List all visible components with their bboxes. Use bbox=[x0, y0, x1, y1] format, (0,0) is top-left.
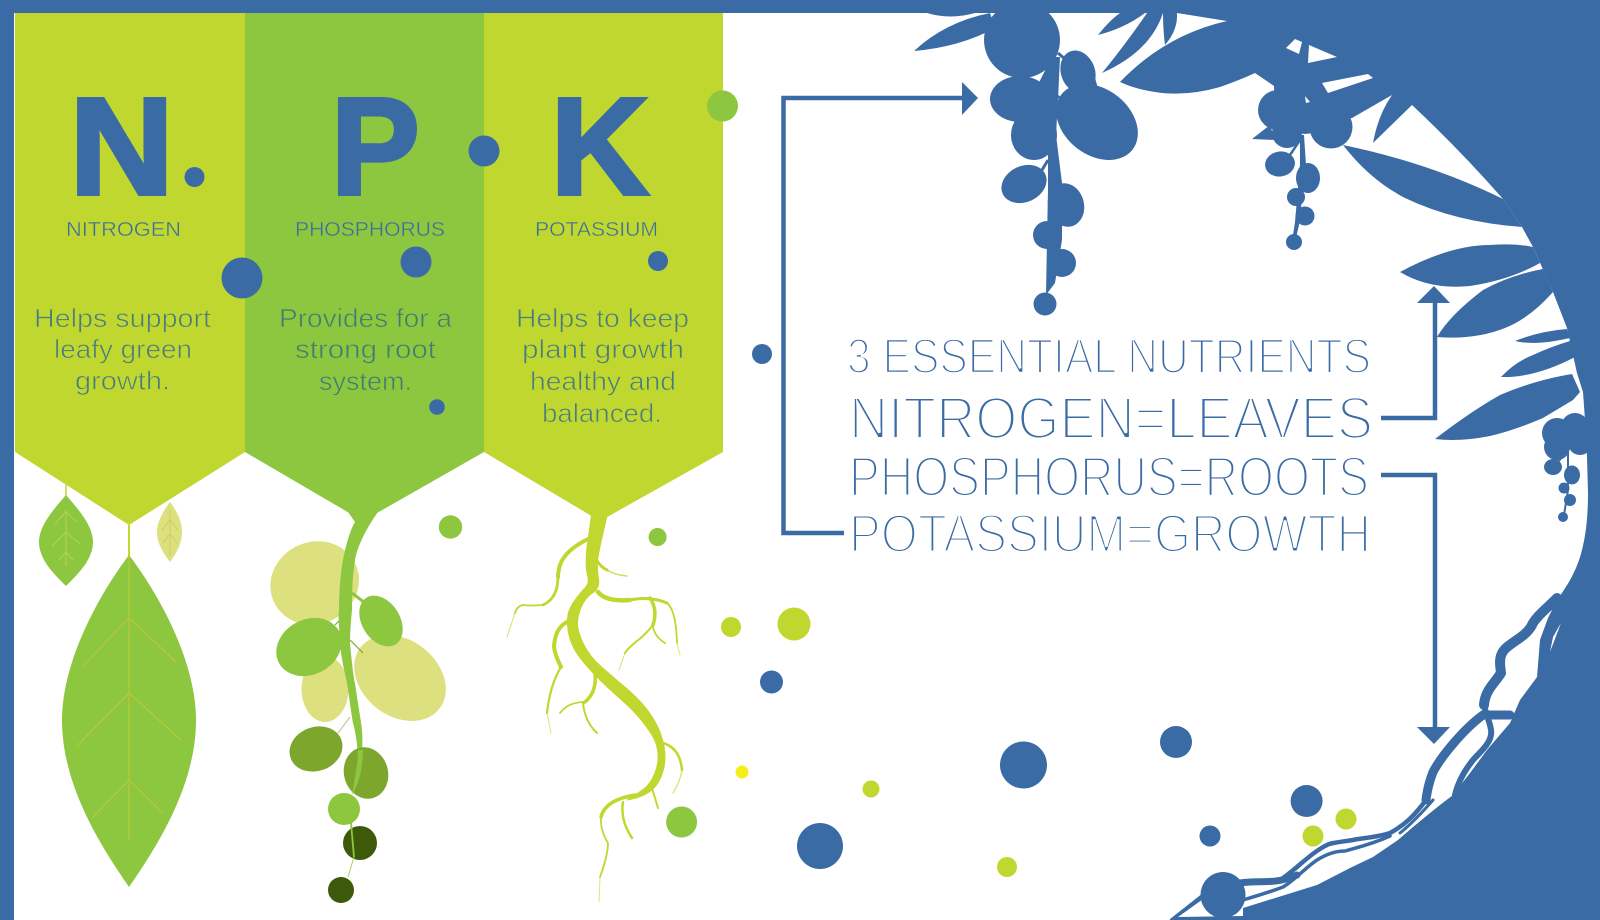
illustration: root web bottom right bbox=[1170, 598, 1561, 920]
heading and nutrient equations: NITROGEN=LEAVES bbox=[849, 386, 1373, 452]
panel: potassium bbox=[484, 12, 723, 521]
label: phosphorus: PHOSPHORUS bbox=[295, 219, 445, 241]
text: potassium description: plant growth bbox=[522, 334, 684, 364]
text: potassium description: Helps to keep bbox=[516, 303, 689, 333]
icon: nitrogen leaves bbox=[39, 484, 196, 887]
illustration: right side leaves bbox=[1343, 145, 1592, 522]
text: nitrogen description: leafy green bbox=[54, 334, 192, 364]
label: potassium: POTASSIUM bbox=[535, 219, 658, 241]
text: potassium description bbox=[516, 303, 689, 428]
arrow: phosphorus to roots bbox=[1381, 475, 1450, 744]
text: nitrogen description bbox=[34, 303, 212, 396]
heading and nutrient equations: PHOSPHORUS=ROOTS bbox=[849, 445, 1369, 509]
letter P: P bbox=[331, 70, 420, 224]
panel: nitrogen bbox=[15, 12, 245, 525]
letter N: N bbox=[70, 70, 174, 224]
decorative dots bbox=[184, 90, 1356, 877]
text: phosphorus description: Provides for a bbox=[279, 303, 453, 333]
arrow: nitrogen to leaves bbox=[1381, 286, 1450, 418]
illustration: hanging vine centre bbox=[1252, 39, 1373, 250]
text: nitrogen description: Helps support bbox=[34, 303, 212, 333]
text: nitrogen description: growth. bbox=[75, 366, 170, 396]
panel: phosphorus bbox=[245, 12, 484, 521]
text: phosphorus description bbox=[279, 303, 453, 396]
text: potassium description: balanced. bbox=[542, 398, 662, 428]
heading and nutrient equations: POTASSIUM=GROWTH bbox=[849, 504, 1371, 564]
letter K: K bbox=[551, 70, 648, 224]
heading and nutrient equations bbox=[847, 330, 1373, 564]
text: potassium description: healthy and bbox=[530, 366, 676, 396]
text: phosphorus description: system. bbox=[319, 366, 412, 396]
arrow: potassium to growth bbox=[784, 82, 978, 533]
icon: phosphorus stem and leaves bbox=[257, 512, 463, 903]
label: nitrogen: NITROGEN bbox=[66, 219, 181, 241]
illustration: hanging vine left bbox=[914, 2, 1177, 316]
text: phosphorus description: strong root bbox=[295, 334, 437, 364]
heading and nutrient equations: 3 ESSENTIAL NUTRIENTS bbox=[847, 330, 1371, 384]
icon: potassium roots bbox=[507, 512, 682, 902]
